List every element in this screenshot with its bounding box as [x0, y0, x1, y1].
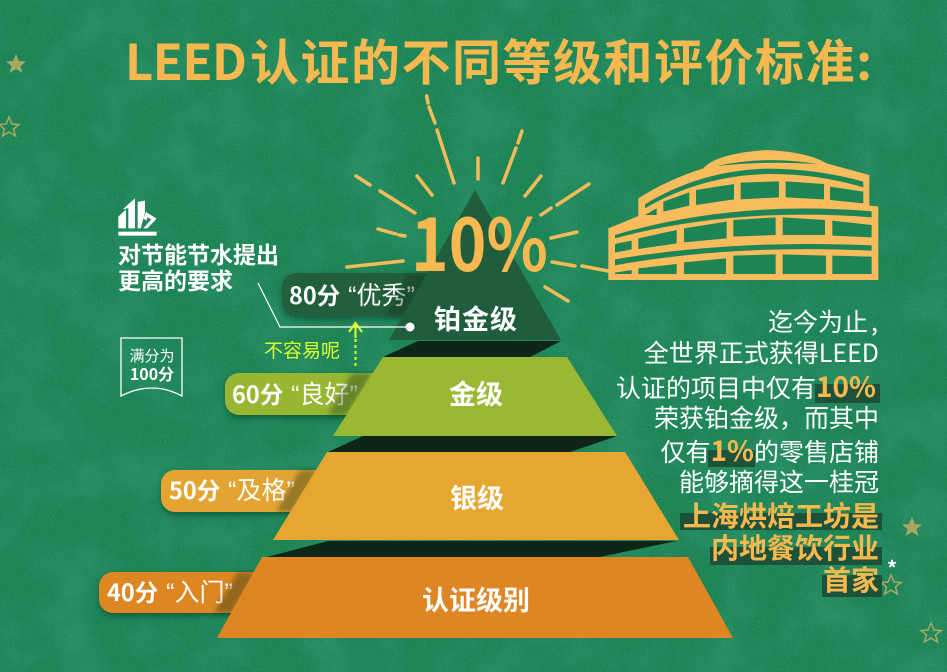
paragraph: platinum statistics: 迄今为止,	[768, 303, 878, 339]
tier: certified: 认证级别	[422, 579, 530, 618]
leader line from requirement note to platinum tier	[258, 283, 414, 332]
tier: platinum: 铂金级	[434, 298, 518, 337]
tier: silver	[273, 452, 679, 540]
label pill: 40 points entry	[99, 572, 269, 613]
paragraph: platinum statistics: 首家	[823, 559, 879, 599]
big 10% figure: 10%	[411, 187, 548, 292]
text: higher energy and water saving requirements	[118, 236, 279, 296]
label pill: 80 points excellent	[282, 273, 452, 316]
tier: gold	[333, 357, 617, 436]
badge: full score 100	[121, 338, 182, 396]
pill edge shadows	[214, 273, 430, 613]
label pill: 80 points excellent: 80分 “优秀”	[289, 277, 415, 311]
paragraph: platinum statistics: 全世界正式获得LEED	[644, 334, 879, 370]
label pill: 60 points good	[225, 373, 395, 415]
arrow: not easy	[264, 323, 362, 366]
label pill: 40 points entry: 40分 “入门”	[107, 574, 233, 608]
icon: building with upward arrow	[118, 198, 157, 236]
paragraph: platinum statistics: 能够摘得这一桂冠	[679, 463, 879, 499]
tier: certified	[217, 557, 733, 638]
tier shadow bands	[267, 341, 676, 557]
building windows and strips	[615, 160, 872, 274]
badge: full score 100: 满分为	[129, 345, 175, 366]
label pill: 60 points good: 60分 “良好”	[232, 376, 358, 410]
pyramid	[217, 190, 733, 638]
badge: full score 100: 100分	[130, 361, 174, 385]
label pill: 50 points pass: 50分 “及格”	[169, 472, 295, 506]
tier: gold: 金级	[449, 373, 503, 412]
label pill: 50 points pass	[161, 470, 331, 512]
paragraph: platinum statistics: 仅有1%的零售店铺	[660, 430, 879, 470]
text: higher energy and water saving requirements: 更高的要求	[118, 262, 233, 296]
building silhouette	[608, 150, 878, 280]
building illustration	[608, 150, 878, 280]
sunburst rays	[347, 96, 608, 301]
text: higher energy and water saving requirements: 对节能节水提出	[118, 236, 279, 270]
title: 认证的不同等级和评价标准:	[250, 24, 872, 95]
footnote asterisk: *	[887, 553, 897, 582]
tier: platinum	[389, 190, 561, 340]
paragraph: platinum statistics: 上海烘焙工坊是	[683, 495, 879, 535]
tier: silver: 银级	[450, 477, 504, 516]
highlight bars	[680, 384, 882, 597]
paragraph: platinum statistics: 认证的项目中仅有10%	[616, 366, 876, 406]
paragraph: platinum statistics	[616, 303, 879, 599]
paragraph: platinum statistics: 荣获铂金级，而其中	[654, 399, 879, 435]
title: LEED	[125, 24, 247, 95]
paragraph: platinum statistics: 内地餐饮行业	[711, 527, 879, 567]
arrow: not easy: 不容易呢	[264, 336, 340, 363]
